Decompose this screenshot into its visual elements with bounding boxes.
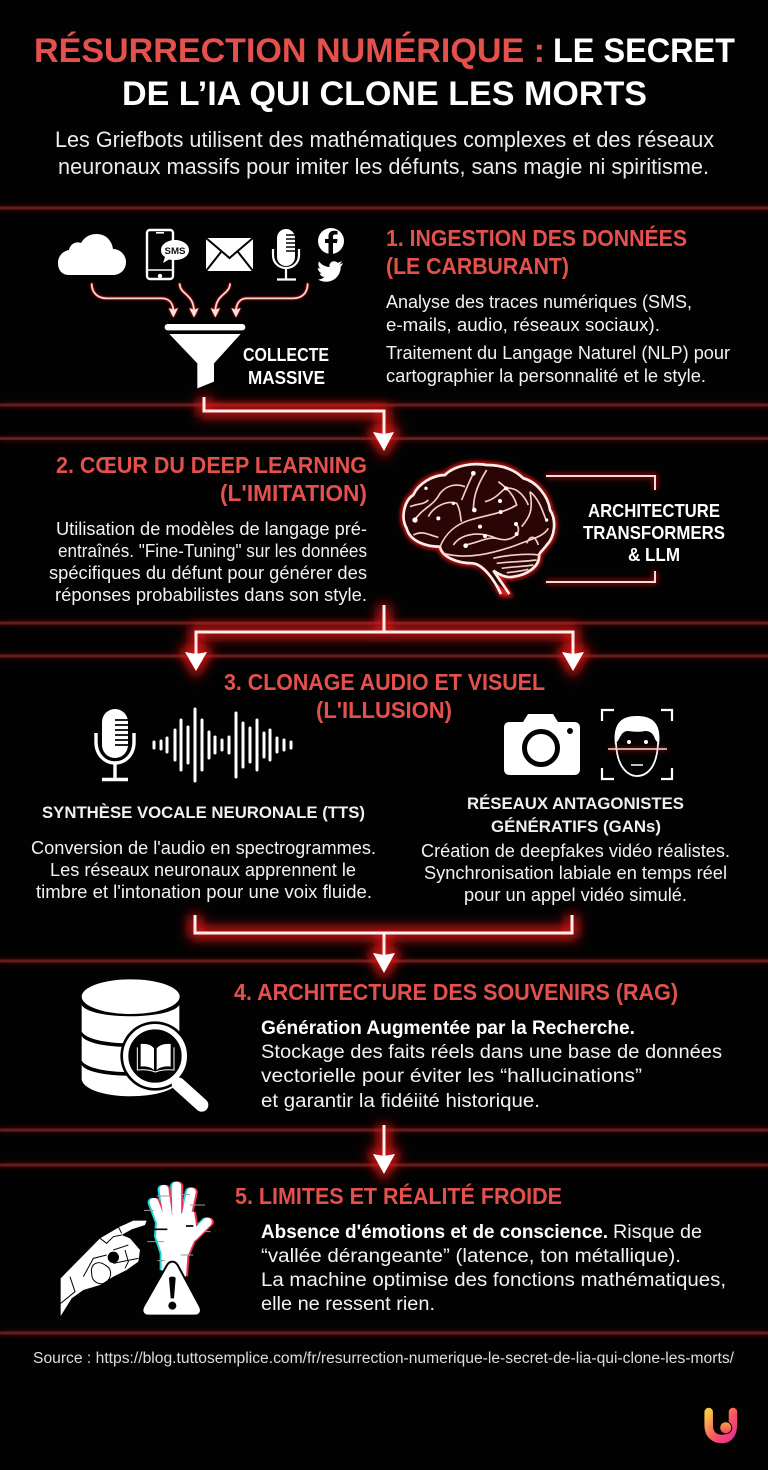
text: step 5 body: Risque de bbox=[613, 1222, 702, 1243]
subheading: GANs: GÉNÉRATIFS (GANs) bbox=[491, 817, 661, 836]
label: collecte massive bbox=[243, 345, 329, 388]
heading: step 2 bbox=[56, 452, 367, 506]
icon: robot hand and human hand with warning bbox=[61, 1186, 211, 1316]
icon: sound waveform bbox=[154, 709, 291, 781]
source line: Source : https://blog.tuttosemplice.com/fr/resurrection-numerique-le-secret-de-lia-qui-clone-les-morts/ bbox=[33, 1350, 735, 1367]
heading: step 1 bbox=[386, 224, 687, 279]
text: step 1 body: Analyse des traces numériques (SMS, bbox=[386, 292, 692, 312]
arrow: step 4 to step 5 bbox=[373, 1125, 395, 1174]
text: step 5 body: Absence d'émotions et de conscience. bbox=[261, 1222, 608, 1243]
icon: face scan bbox=[602, 710, 672, 779]
subheading: GANs: RÉSEAUX ANTAGONISTES bbox=[467, 794, 684, 813]
icon: microphone bbox=[273, 229, 299, 280]
text: step 2 body: entraînés. "Fine-Tuning" sur les données bbox=[58, 541, 367, 561]
heading: step 2: 2. CŒUR DU DEEP LEARNING bbox=[56, 452, 367, 478]
panel: step 5 limits bbox=[61, 1182, 726, 1316]
text: step 5 body: La machine optimise des fonctions mathématiques, bbox=[261, 1270, 726, 1291]
icon: cloud bbox=[58, 234, 126, 275]
title: DE L’IA QUI CLONE LES MORTS bbox=[122, 75, 647, 113]
heading: step 4: 4. ARCHITECTURE DES SOUVENIRS (RAG) bbox=[234, 979, 678, 1005]
robot hand bbox=[61, 1221, 147, 1316]
icon: phone with SMS bubble: SMS bbox=[164, 246, 186, 256]
logo bbox=[709, 1412, 733, 1439]
text: voice synthesis body: Conversion de l'audio en spectrogrammes. bbox=[31, 838, 376, 858]
subheading: neural voice synthesis: SYNTHÈSE VOCALE NEURONALE (TTS) bbox=[42, 803, 365, 822]
text: GANs body: pour un appel vidéo simulé. bbox=[464, 885, 687, 905]
icon: database with magnifier bbox=[82, 979, 202, 1105]
text: step 2 body: Utilisation de modèles de langage pré- bbox=[56, 519, 367, 539]
icon: camera bbox=[504, 714, 580, 775]
heading: step 5: 5. LIMITES ET RÉALITÉ FROIDE bbox=[235, 1182, 562, 1209]
text: step 5 body: elle ne ressent rien. bbox=[261, 1294, 435, 1315]
icon: brain bbox=[404, 464, 554, 594]
heading: step 3: (L'ILLUSION) bbox=[316, 697, 452, 723]
arrows into funnel bbox=[92, 283, 308, 317]
text: GANs body bbox=[421, 841, 730, 905]
human hand glitch bbox=[144, 1186, 211, 1277]
text: voice synthesis body bbox=[31, 838, 376, 902]
text: step 2 body: réponses probabilistes dans son style. bbox=[55, 585, 367, 605]
text: step 4 body: Génération Augmentée par la Recherche. bbox=[261, 1018, 635, 1039]
label: collecte massive: MASSIVE bbox=[248, 368, 325, 388]
heading: step 3: 3. CLONAGE AUDIO ET VISUEL bbox=[224, 669, 545, 695]
label: architecture transformers and LLM: & LLM bbox=[628, 545, 680, 565]
title: LE SECRET bbox=[553, 32, 735, 70]
warning triangle bbox=[142, 1262, 201, 1316]
text: step 4 body bbox=[261, 1018, 722, 1112]
panel: step 2 deep learning bbox=[49, 452, 725, 605]
label: architecture transformers and LLM: TRANSFORMERS bbox=[583, 523, 725, 543]
text: step 5 body bbox=[261, 1222, 726, 1315]
subtitle: Les Griefbots utilisent des mathématiques complexes et des réseaux bbox=[55, 127, 714, 152]
label: architecture transformers and LLM: ARCHITECTURE bbox=[588, 501, 720, 521]
panel: step 3 audio and visual cloning bbox=[31, 669, 730, 905]
subtitle: neuronaux massifs pour imiter les défunts, sans magie ni spiritisme. bbox=[58, 154, 709, 179]
text: step 4 body: vectorielle pour éviter les “hallucinations” bbox=[261, 1066, 642, 1087]
icon: funnel bbox=[165, 324, 245, 388]
heading: step 1: 1. INGESTION DES DONNÉES bbox=[386, 224, 687, 251]
text: step 4 body: et garantir la fidéiité historique. bbox=[261, 1091, 540, 1112]
text: step 1 body: cartographier la personnalité et le style. bbox=[386, 366, 706, 386]
icon: facebook bbox=[318, 228, 344, 254]
text: step 1 body: e-mails, audio, réseaux sociaux). bbox=[386, 315, 660, 335]
arrow: step 1 to step 2 bbox=[204, 397, 394, 451]
text: step 2 body: spécifiques du défunt pour générer des bbox=[49, 563, 367, 583]
text: step 4 body: Stockage des faits réels dans une base de données bbox=[261, 1042, 722, 1063]
heading: step 3 bbox=[224, 669, 545, 723]
icon: envelope bbox=[206, 238, 253, 271]
text: GANs body: Synchronisation labiale en temps réel bbox=[424, 863, 727, 883]
text: step 2 body bbox=[49, 519, 367, 605]
arrow: step 2 to audio and visual branches bbox=[185, 605, 584, 671]
panel: step 4 memory architecture bbox=[82, 979, 722, 1112]
subtitle bbox=[55, 127, 714, 179]
text: step 1 body bbox=[386, 292, 730, 386]
label: architecture transformers and LLM bbox=[583, 501, 725, 565]
label: collecte massive: COLLECTE bbox=[243, 345, 329, 365]
icon: phone with SMS bubble bbox=[147, 230, 189, 279]
icon: twitter bbox=[318, 261, 343, 282]
text: GANs body: Création de deepfakes vidéo réalistes. bbox=[421, 841, 730, 861]
text: step 1 body: Traitement du Langage Naturel (NLP) pour bbox=[386, 343, 730, 363]
arrow: merge to step 4 bbox=[195, 915, 572, 973]
text: step 5 body: “vallée dérangeante” (latence, ton métallique). bbox=[261, 1246, 681, 1267]
icon: microphone bbox=[96, 709, 134, 780]
text: voice synthesis body: timbre et l'intonation pour une voix fluide. bbox=[36, 882, 372, 902]
heading: step 2: (L'IMITATION) bbox=[220, 480, 367, 506]
subheading: GANs bbox=[467, 794, 684, 836]
panel: step 1 data ingestion bbox=[58, 224, 730, 388]
title bbox=[34, 32, 735, 113]
heading: step 1: (LE CARBURANT) bbox=[386, 253, 569, 279]
text: voice synthesis body: Les réseaux neuronaux apprennent le bbox=[50, 860, 356, 880]
bracket: architecture label bbox=[546, 476, 655, 582]
title: RÉSURRECTION NUMÉRIQUE : bbox=[34, 32, 545, 70]
